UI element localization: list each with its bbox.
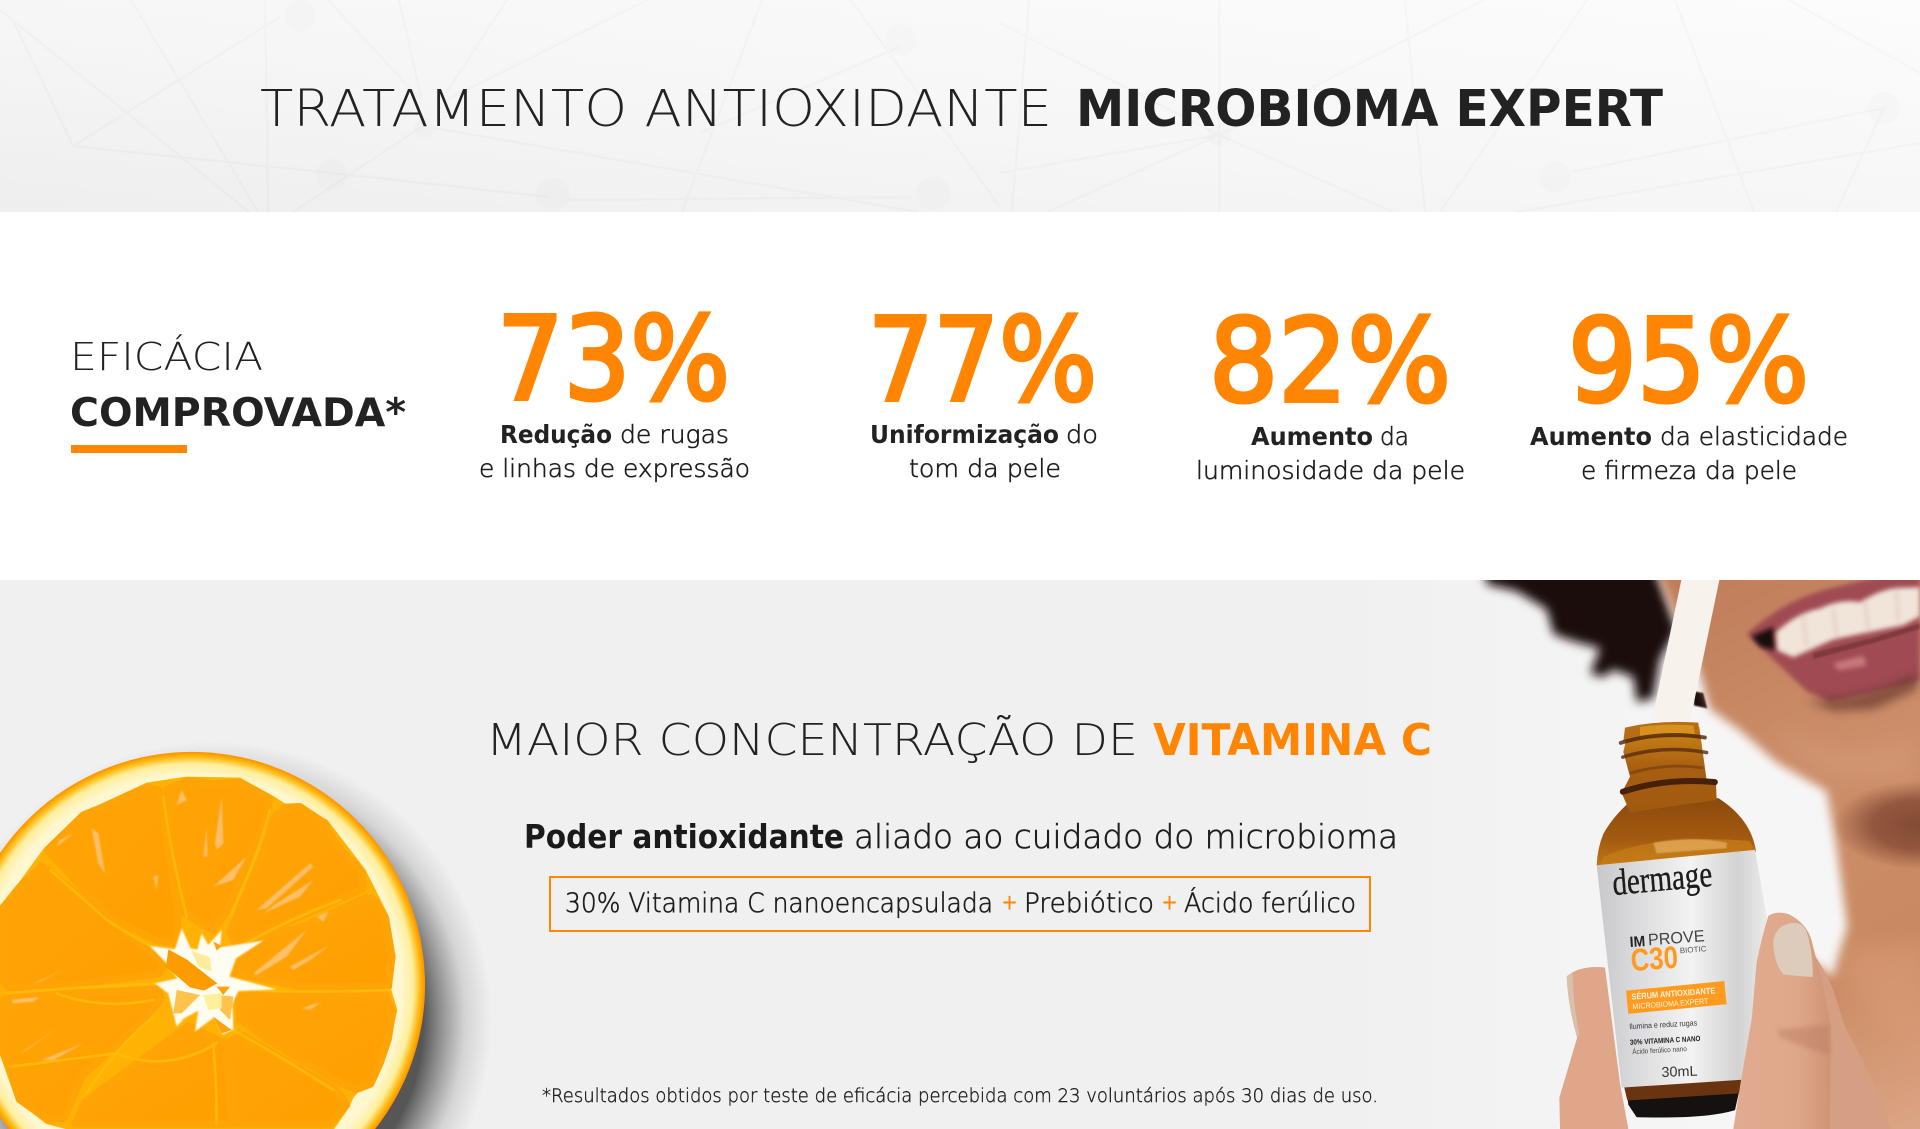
title: TRATAMENTO ANTIOXIDANTE xyxy=(260,80,1052,139)
bottle label text: Ilumina e reduz rugas xyxy=(1629,1018,1698,1031)
ingredients box: 30% Vitamina C nanoencapsulada xyxy=(565,888,993,919)
stat: 95%: e firmeza da pele xyxy=(1581,456,1797,485)
bottle label text: C30 xyxy=(1630,941,1679,978)
stat: 77%: 77% xyxy=(868,294,1097,428)
stat: 95% xyxy=(1530,295,1848,485)
heading: eficácia comprovada: EFICÁCIA xyxy=(70,335,263,379)
bottle label text: MICROBIOMA EXPERT xyxy=(1632,996,1709,1011)
stat: 82%: Aumento xyxy=(1251,422,1373,451)
bottle xyxy=(1597,722,1768,1118)
bottle label text: IM xyxy=(1629,934,1646,951)
orange core xyxy=(150,928,277,1035)
stat: 73%: Redução xyxy=(500,420,612,449)
bottle label text: SÉRUM ANTIOXIDANTE xyxy=(1631,985,1716,1002)
image: orange slice xyxy=(0,700,550,1129)
ingredients box: Ácido ferúlico xyxy=(1184,887,1356,919)
stat: 95%: da elasticidade xyxy=(1660,422,1848,451)
stat: 95%: Aumento xyxy=(1530,422,1652,451)
title: MICROBIOMA EXPERT xyxy=(1076,80,1663,139)
heading: maior concentração de vitamina c xyxy=(486,714,1432,766)
face and neck xyxy=(1650,556,1920,1129)
stat: 82%: da xyxy=(1380,422,1409,451)
bottle label text xyxy=(1611,853,1727,1080)
subheading: poder antioxidante xyxy=(524,817,1398,856)
bottle label text: dermage xyxy=(1611,853,1714,903)
heading: maior concentração de vitamina c: MAIOR CONCENTRAÇÃO DE xyxy=(486,714,1138,766)
bottle label text: 30mL xyxy=(1661,1063,1698,1080)
stat: 73% xyxy=(479,293,750,483)
ingredients box: + xyxy=(1002,887,1017,918)
heading: maior concentração de vitamina c: VITAMINA C xyxy=(1153,715,1432,766)
image: woman holding serum bottle xyxy=(1483,556,1920,1129)
ingredients box xyxy=(550,877,1370,931)
stat: 82%: luminosidade da pele xyxy=(1196,456,1465,485)
stat: 77%: tom da pele xyxy=(909,454,1061,483)
stat: 82% xyxy=(1196,295,1465,485)
stat: 77%: Uniformização xyxy=(870,420,1059,449)
stat: 77%: do xyxy=(1066,420,1098,449)
ingredients box: Prebiótico xyxy=(1024,888,1154,919)
stat: 82%: 82% xyxy=(1209,295,1451,429)
panel: proven efficacy xyxy=(70,293,1848,485)
mouth xyxy=(1747,566,1920,711)
bottle label text: 30% VITAMINA C NANO xyxy=(1630,1034,1701,1047)
stat: 73%: e linhas de expressão xyxy=(479,454,750,483)
panel: vitamin C background xyxy=(0,580,1920,1129)
bottle label text: BIOTIC xyxy=(1680,944,1707,955)
stat: 95%: 95% xyxy=(1568,295,1809,429)
subheading: poder antioxidante: aliado ao cuidado do microbioma xyxy=(854,817,1398,856)
hair xyxy=(1483,563,1707,708)
bottle label text: Ácido ferúlico nano xyxy=(1632,1044,1687,1056)
hand xyxy=(1559,913,1891,1129)
stat: 73%: de rugas xyxy=(620,420,729,449)
footnote: *Resultados obtidos por teste de eficácia percebida com 23 voluntários após 30 dias de uso. xyxy=(542,1086,1378,1107)
subheading: poder antioxidante: Poder antioxidante xyxy=(524,817,844,856)
stat: 77% xyxy=(868,294,1098,483)
panel: header background with molecular network xyxy=(0,0,1920,212)
ingredients box: + xyxy=(1162,887,1177,918)
stat: 73%: 73% xyxy=(497,293,730,427)
title xyxy=(260,80,1663,139)
heading: eficácia comprovada: COMPROVADA* xyxy=(70,391,406,436)
dropper xyxy=(1652,574,1721,722)
bottle label text: PROVE xyxy=(1647,928,1705,950)
heading: eficácia comprovada xyxy=(70,335,406,453)
